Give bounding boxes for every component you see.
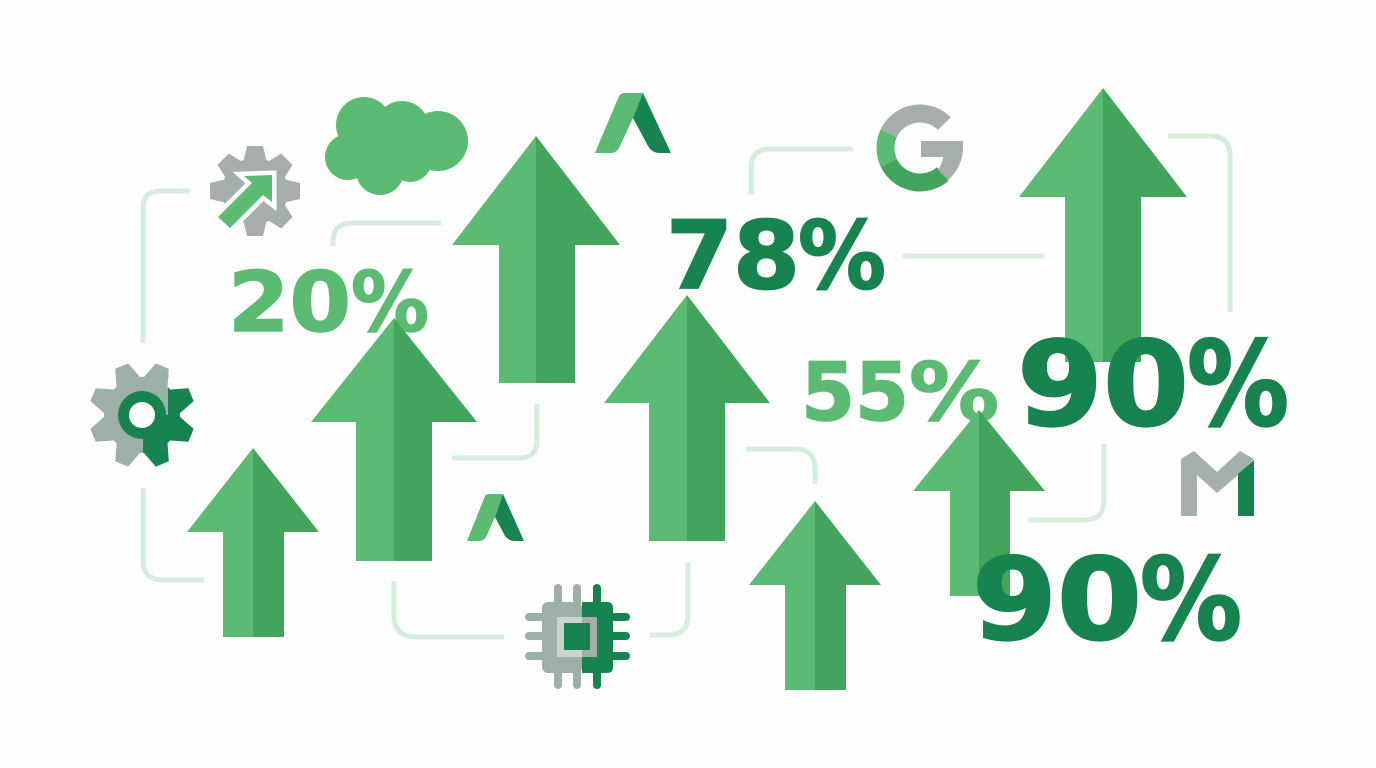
stat: 90% upper: 90 bbox=[1017, 316, 1189, 453]
icon: G logo bbox=[885, 113, 963, 183]
arrow: bottom centre bbox=[749, 501, 881, 690]
stat: 90% lower: 90 bbox=[972, 534, 1142, 666]
icon: A logo large bbox=[595, 93, 671, 153]
stat: 20%: 20 bbox=[228, 254, 351, 351]
connector lines bbox=[143, 136, 1230, 637]
arrow: centre left bbox=[311, 318, 477, 561]
icon: gear with arrow bbox=[210, 146, 300, 236]
arrow: lower right bbox=[913, 410, 1045, 596]
arrow: centre bbox=[604, 295, 770, 541]
arrow: top centre bbox=[452, 136, 620, 383]
stat: 90% lower: % bbox=[1140, 534, 1242, 666]
stat: 78%: % bbox=[798, 202, 886, 311]
stat: 90% upper: % bbox=[1187, 316, 1289, 453]
stat: 20%: % bbox=[351, 254, 429, 351]
icon: A logo small bbox=[467, 494, 524, 541]
icon: cloud bbox=[325, 97, 468, 195]
stat: 55%: 55 bbox=[801, 346, 909, 439]
arrow: top right bbox=[1019, 88, 1187, 362]
icon: M logo bbox=[1181, 451, 1254, 516]
stat: 55%: % bbox=[909, 346, 999, 439]
stat: 78%: 78 bbox=[666, 202, 800, 311]
arrow: lower left bbox=[187, 448, 319, 637]
icon: chip bbox=[525, 584, 630, 689]
icon: two-tone gear bbox=[88, 361, 196, 469]
